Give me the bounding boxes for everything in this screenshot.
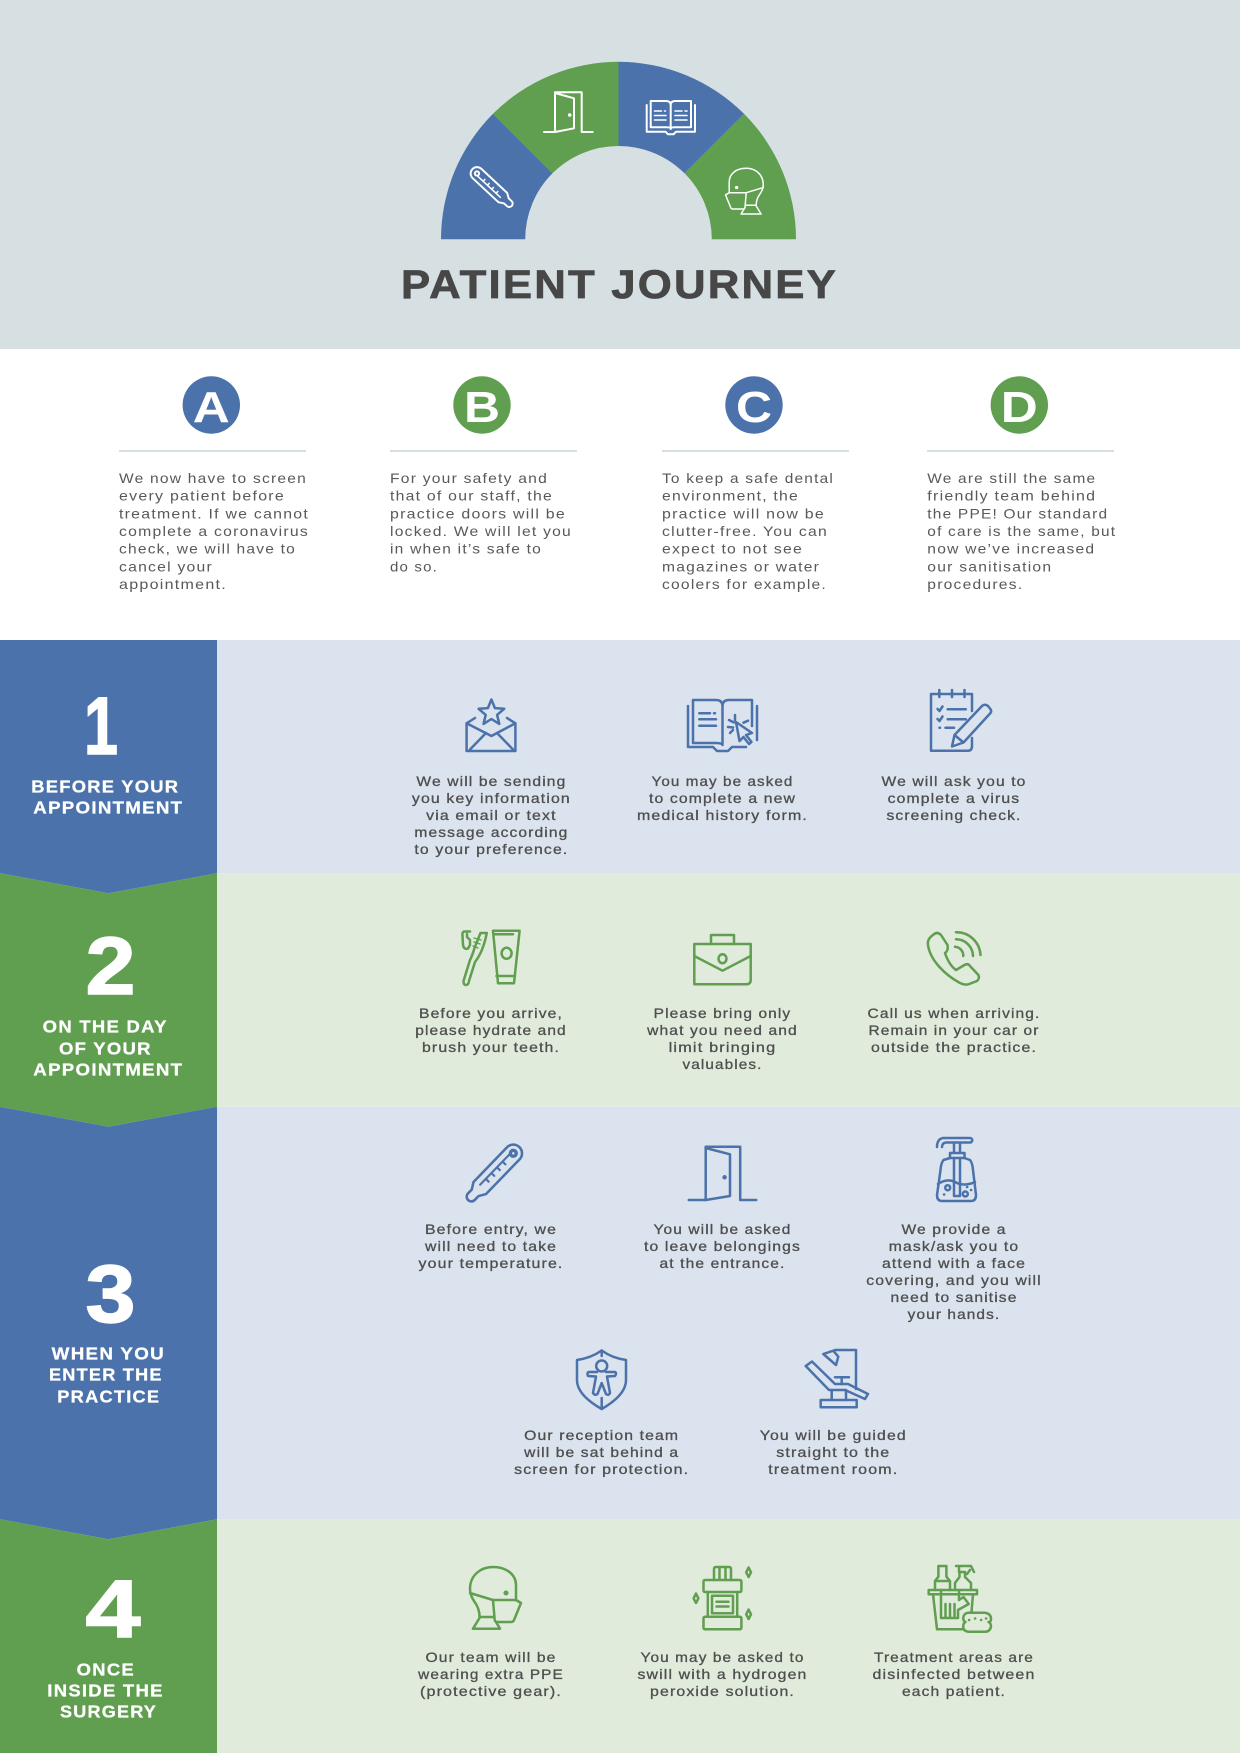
- badge A: A: [193, 383, 230, 432]
- step 4 tab: [0, 1519, 217, 1753]
- item: mouthwash: You may be asked to: [640, 1649, 804, 1665]
- panel: step 3: [0, 1107, 1240, 1539]
- item: bring only what you need: Please bring only: [654, 1005, 791, 1021]
- item: disinfection: disinfected between: [872, 1666, 1036, 1682]
- icon: pump bottle: [937, 1138, 976, 1201]
- text B: that of our staff, the: [390, 488, 553, 504]
- icon: cleaning bucket: [929, 1566, 991, 1632]
- badge A: [183, 376, 240, 434]
- step 2 tab: OF YOUR: [59, 1039, 152, 1059]
- item: call on arrival: outside the practice.: [871, 1039, 1037, 1055]
- column D: [927, 376, 1116, 592]
- item: mouthwash: swill with a hydrogen: [638, 1666, 808, 1682]
- step 1 tab: 1: [84, 681, 118, 772]
- item: email: message according: [414, 824, 568, 840]
- column A: [119, 376, 309, 592]
- panel: step 4: [0, 1519, 1240, 1753]
- badge B: [453, 376, 511, 434]
- item: mask and sanitiser: [866, 1138, 1042, 1322]
- step 4 tab: INSIDE THE: [47, 1681, 164, 1701]
- title: PATIENT JOURNEY: [401, 263, 838, 307]
- item: belongings: to leave belongings: [644, 1238, 801, 1254]
- icon: thermometer: [468, 164, 516, 211]
- panel: rules section: [0, 349, 1240, 640]
- step 2 tab: APPOINTMENT: [33, 1059, 183, 1079]
- item: belongings: You will be asked: [654, 1221, 792, 1237]
- text C: practice will now be: [662, 505, 825, 521]
- item: medical history: You may be asked: [652, 773, 794, 789]
- icon: thermometer: [462, 1141, 526, 1206]
- icon: book: [647, 101, 695, 134]
- item: hydrate and brush: Before you arrive,: [419, 1005, 563, 1021]
- item: reception screen: [514, 1350, 689, 1477]
- step 2 tab: [0, 873, 217, 1127]
- item: PPE: [417, 1567, 564, 1699]
- text D: our sanitisation: [927, 558, 1052, 574]
- item: disinfection: [872, 1566, 1036, 1699]
- text A: [119, 470, 309, 592]
- item: screening check: We will ask you to: [882, 773, 1026, 789]
- icon: book with cursor: [688, 700, 757, 751]
- step 3 tab: [0, 1107, 217, 1539]
- badge C: [725, 376, 783, 434]
- item: mask and sanitiser: mask/ask you to: [889, 1238, 1019, 1254]
- item: screening check: screening check.: [886, 807, 1022, 823]
- item: medical history: [637, 700, 808, 823]
- text C: coolers for example.: [662, 576, 827, 592]
- icon: masked head: [470, 1567, 521, 1629]
- item: PPE: Our team will be: [426, 1649, 556, 1665]
- step 4 tab: SURGERY: [60, 1702, 157, 1722]
- icon: toothbrush and toothpaste: [462, 931, 520, 985]
- icon: telephone: [928, 932, 980, 985]
- item: mask and sanitiser: We provide a: [902, 1221, 1006, 1237]
- panel: step 2: [0, 873, 1240, 1127]
- badge C: C: [736, 383, 772, 432]
- item: belongings: at the entrance.: [660, 1255, 786, 1271]
- column C: [662, 376, 849, 592]
- item: hydrate and brush: [415, 931, 567, 1055]
- item: medical history: to complete a new: [649, 790, 796, 806]
- item: call on arrival: Call us when arriving.: [868, 1005, 1040, 1021]
- item: email: We will be sending: [416, 773, 566, 789]
- step 3 tab: WHEN YOU: [52, 1343, 165, 1363]
- item: reception screen: screen for protection.: [514, 1461, 689, 1477]
- text D: [927, 470, 1116, 592]
- item: belongings: [644, 1147, 801, 1271]
- item: mask and sanitiser: covering, and you will: [866, 1272, 1042, 1288]
- text C: expect to not see: [662, 541, 803, 557]
- badge B: B: [464, 383, 500, 432]
- text C: environment, the: [662, 488, 799, 504]
- text C: To keep a safe dental: [662, 470, 834, 486]
- icon: mouthwash bottle: [694, 1567, 751, 1629]
- badge D: [991, 376, 1048, 434]
- step 2 tab: 2: [86, 921, 136, 1012]
- text D: procedures.: [927, 576, 1023, 592]
- panel: step 1: [0, 640, 1240, 893]
- item: email: you key information: [412, 790, 571, 806]
- item: temperature: your temperature.: [418, 1255, 564, 1271]
- step 4 tab: ONCE: [77, 1660, 135, 1680]
- item: mask and sanitiser: your hands.: [908, 1306, 1000, 1322]
- text C: [662, 470, 834, 592]
- step 1 tab: APPOINTMENT: [33, 798, 183, 818]
- text D: now we’ve increased: [927, 541, 1095, 557]
- item: temperature: will need to take: [424, 1238, 557, 1254]
- text B: locked. We will let you: [390, 523, 572, 539]
- semicircle arc diagram: [441, 62, 796, 239]
- item: bring only what you need: what you need and: [646, 1022, 798, 1038]
- item: email: to your preference.: [414, 841, 568, 857]
- text D: We are still the same: [927, 470, 1096, 486]
- step 4 tab: 4: [86, 1564, 141, 1655]
- item: bring only what you need: limit bringing: [669, 1039, 776, 1055]
- item: mouthwash: [638, 1567, 808, 1699]
- item: hydrate and brush: please hydrate and: [415, 1022, 567, 1038]
- step 3 tab: ENTER THE: [49, 1365, 163, 1385]
- item: treatment room: You will be guided: [760, 1427, 907, 1443]
- item: screening check: complete a virus: [888, 790, 1020, 806]
- item: call on arrival: [868, 932, 1040, 1055]
- badge D: D: [1001, 383, 1038, 432]
- icon: shield with person: [577, 1350, 626, 1409]
- item: email: via email or text: [426, 807, 557, 823]
- icon: door: [544, 92, 593, 132]
- item: temperature: Before entry, we: [425, 1221, 557, 1237]
- icon: dental chair: [806, 1350, 868, 1407]
- item: PPE: (protective gear).: [420, 1683, 562, 1699]
- item: reception screen: will be sat behind a: [523, 1444, 679, 1460]
- step 1 tab: BEFORE YOUR: [31, 777, 179, 797]
- text A: cancel your: [119, 558, 213, 574]
- item: email: [412, 700, 571, 857]
- text A: complete a coronavirus: [119, 523, 309, 539]
- text A: every patient before: [119, 488, 285, 504]
- text A: We now have to screen: [119, 470, 307, 486]
- item: PPE: wearing extra PPE: [417, 1666, 564, 1682]
- text B: do so.: [390, 558, 438, 574]
- step 1 tab: [0, 640, 217, 893]
- step 2 tab: ON THE DAY: [43, 1017, 168, 1037]
- text B: For your safety and: [390, 470, 548, 486]
- item: temperature: [418, 1141, 564, 1271]
- icon: masked head: [726, 168, 763, 214]
- text B: [390, 470, 572, 574]
- item: disinfection: each patient.: [902, 1683, 1006, 1699]
- item: screening check: [882, 690, 1026, 823]
- icon: door: [689, 1147, 756, 1200]
- item: treatment room: treatment room.: [768, 1461, 898, 1477]
- text D: the PPE! Our standard: [927, 505, 1108, 521]
- text A: appointment.: [119, 576, 227, 592]
- step 3 tab: PRACTICE: [57, 1387, 160, 1407]
- item: bring only what you need: [646, 935, 798, 1072]
- item: call on arrival: Remain in your car or: [868, 1022, 1040, 1038]
- item: hydrate and brush: brush your teeth.: [422, 1039, 560, 1055]
- step 3 tab: 3: [86, 1249, 136, 1340]
- text B: practice doors will be: [390, 505, 566, 521]
- column B: [390, 376, 577, 574]
- item: bring only what you need: valuables.: [682, 1056, 762, 1072]
- item: reception screen: Our reception team: [524, 1427, 679, 1443]
- text A: check, we will have to: [119, 541, 296, 557]
- item: mouthwash: peroxide solution.: [650, 1683, 795, 1699]
- header panel: [0, 0, 1240, 349]
- item: mask and sanitiser: attend with a face: [882, 1255, 1026, 1271]
- icon: envelope with star: [467, 700, 515, 751]
- text C: clutter-free. You can: [662, 523, 828, 539]
- item: mask and sanitiser: need to sanitise: [890, 1289, 1018, 1305]
- item: treatment room: straight to the: [776, 1444, 890, 1460]
- text B: in when it’s safe to: [390, 541, 542, 557]
- icon: briefcase: [694, 935, 751, 984]
- text A: treatment. If we cannot: [119, 505, 309, 521]
- text D: friendly team behind: [927, 488, 1096, 504]
- item: medical history: medical history form.: [637, 807, 808, 823]
- icon: checklist and pencil: [931, 690, 991, 751]
- item: disinfection: Treatment areas are: [874, 1649, 1034, 1665]
- item: treatment room: [760, 1350, 907, 1477]
- text C: magazines or water: [662, 558, 820, 574]
- text D: of care is the same, but: [927, 523, 1116, 539]
